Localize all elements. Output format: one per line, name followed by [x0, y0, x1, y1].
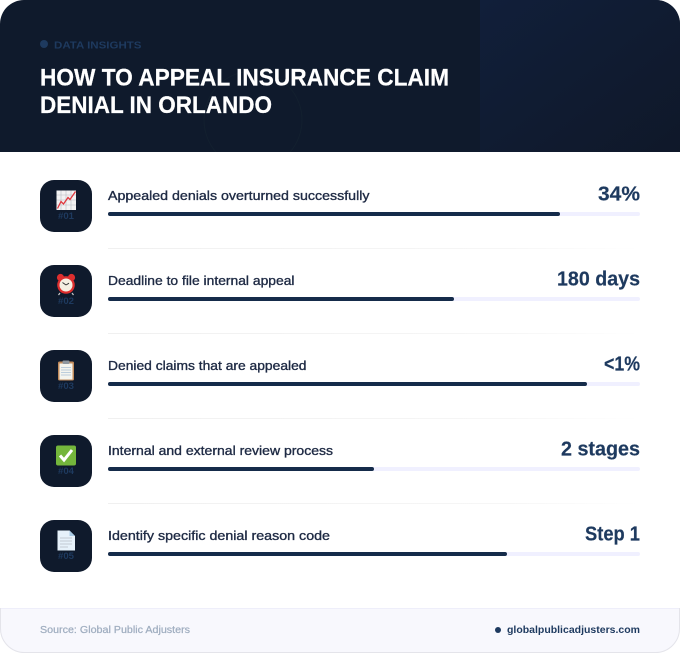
label: Deadline to file internal appeal: [108, 273, 295, 288]
progress bar: [108, 552, 640, 556]
title: [41, 68, 448, 114]
row 4: review process: [40, 435, 640, 487]
website: globalpublicadjusters.com: [507, 625, 640, 636]
title: HOW TO APPEAL INSURANCE CLAIM: [40, 64, 449, 92]
icon: alarm clock: #02: [58, 296, 74, 306]
eyebrow: data insights: [40, 40, 141, 48]
icon: check mark: [40, 435, 92, 487]
progress bar: [108, 382, 640, 386]
value: 2 stages: [561, 438, 640, 460]
progress bar: [108, 467, 640, 471]
label: Identify specific denial reason code: [108, 528, 330, 543]
icon: document: #05: [58, 551, 74, 561]
icon: alarm clock: [40, 265, 92, 317]
label: Internal and external review process: [108, 443, 334, 458]
value: <1%: [604, 354, 640, 376]
label: Appealed denials overturned successfully: [108, 188, 370, 203]
progress bar: [108, 297, 640, 301]
icon: check mark: #04: [58, 466, 74, 476]
source text: Source: Global Public Adjusters: [40, 625, 190, 636]
value: Step 1: [585, 524, 640, 546]
row 5: denial reason code: [40, 520, 640, 572]
row 1: appealed denials: [40, 180, 640, 232]
icon: clipboard: [40, 350, 92, 402]
eyebrow: data insights: DATA INSIGHTS: [54, 40, 142, 52]
row 3: denied claims: [40, 350, 640, 402]
value: 34%: [598, 184, 640, 206]
footer: [1, 608, 679, 636]
progress bar: [108, 212, 640, 216]
icon: chart: #01: [58, 211, 74, 221]
header panel: [0, 0, 680, 152]
icon: clipboard: #03: [58, 381, 74, 391]
row 2: deadline: [40, 265, 640, 317]
value: 180 days: [557, 268, 640, 290]
icon: chart: [40, 180, 92, 232]
icon: document: [40, 520, 92, 572]
label: Denied claims that are appealed: [108, 358, 306, 373]
title: DENIAL IN ORLANDO: [40, 92, 272, 119]
